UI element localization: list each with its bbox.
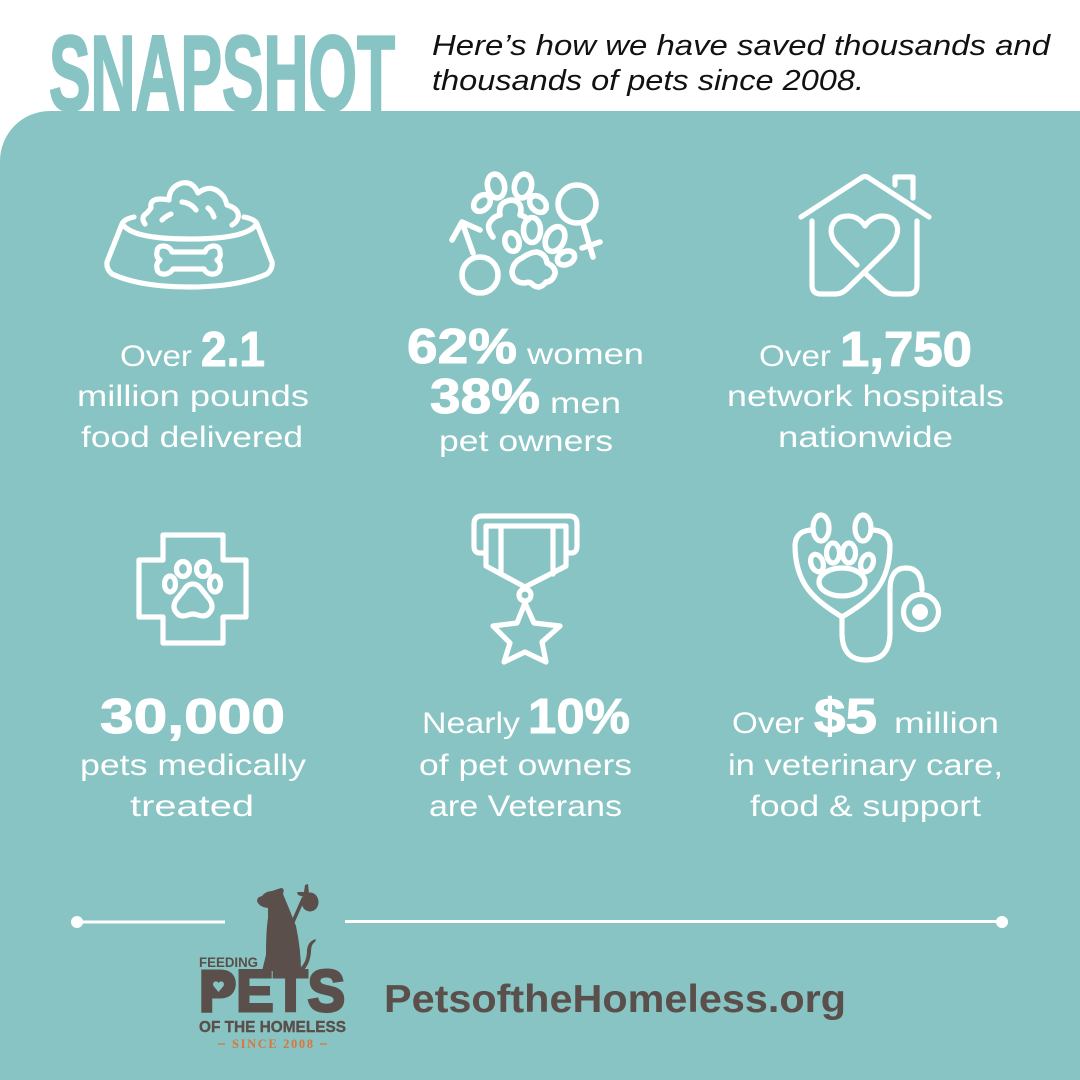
figure: nearly: Nearly [422, 707, 520, 740]
stat: veterans [419, 516, 632, 823]
stat: pets treated [80, 535, 306, 823]
stat: food delivered [77, 183, 309, 454]
footer divider right [345, 916, 1008, 928]
stat: network hospitals [727, 176, 1004, 454]
figure: over 2.1: Over [120, 340, 192, 373]
number: 1,750: 1,750 [840, 323, 972, 377]
caption line: food delivered: food delivered [81, 421, 303, 454]
caption line: million pounds: million pounds [77, 380, 309, 413]
intro text: thousands of pets since 2008. [432, 65, 864, 97]
logo word: PETS: PETS [199, 959, 345, 1024]
figure: over: Over [732, 707, 804, 740]
caption line: in veterinary care: in veterinary care, [728, 749, 1003, 782]
caption line: of pet owners: of pet owners [419, 749, 632, 782]
label: men: men [550, 387, 621, 420]
icon: paws with gender symbols [452, 172, 600, 293]
number: 2.1: 2.1 [201, 323, 265, 377]
label: million: million [894, 707, 999, 740]
number: 62%: 62% [407, 320, 517, 374]
logo dashes [218, 1043, 327, 1045]
caption line: food and support: food & support [750, 790, 982, 823]
icon: heart in P [207, 977, 231, 994]
stat: veterinary care [728, 515, 1003, 823]
icon: food bowl with bone [107, 183, 272, 287]
number: $5: $5 [814, 690, 877, 744]
caption line: nationwide: nationwide [778, 421, 953, 454]
number: 10%: 10% [528, 690, 630, 744]
icon: stethoscope with paw [795, 515, 938, 660]
label: women: women [526, 338, 644, 371]
caption: pet owners: pet owners [439, 425, 613, 458]
figure: over: Over [759, 340, 831, 373]
icon: medal [474, 516, 577, 662]
icon: medical cross with paw [139, 535, 246, 643]
website url: PetsoftheHomeless.org [384, 978, 846, 1021]
title: SNAPSHOT [49, 13, 395, 133]
footer divider left [71, 916, 225, 928]
stat: women and men [407, 172, 644, 458]
intro text: Here’s how we have saved thousands and [432, 30, 1051, 62]
icon: dog silhouette with bindle [257, 884, 318, 971]
number: 38%: 38% [430, 370, 540, 424]
caption line: are Veterans: are Veterans [429, 790, 622, 823]
logo word: FEEDING: FEEDING [199, 954, 258, 970]
logo line: since 2008: SINCE 2008 [232, 1037, 313, 1051]
caption line: network hospitals: network hospitals [727, 380, 1004, 413]
logo: Feeding Pets of the Homeless [199, 884, 346, 1051]
intro text [432, 30, 1051, 97]
caption line: treated: treated [130, 790, 254, 823]
logo line: OF THE HOMELESS: OF THE HOMELESS [199, 1019, 346, 1036]
icon: house with heart [801, 176, 929, 294]
caption line: pets medically: pets medically [80, 749, 306, 782]
number: 30,000: 30,000 [100, 690, 285, 744]
